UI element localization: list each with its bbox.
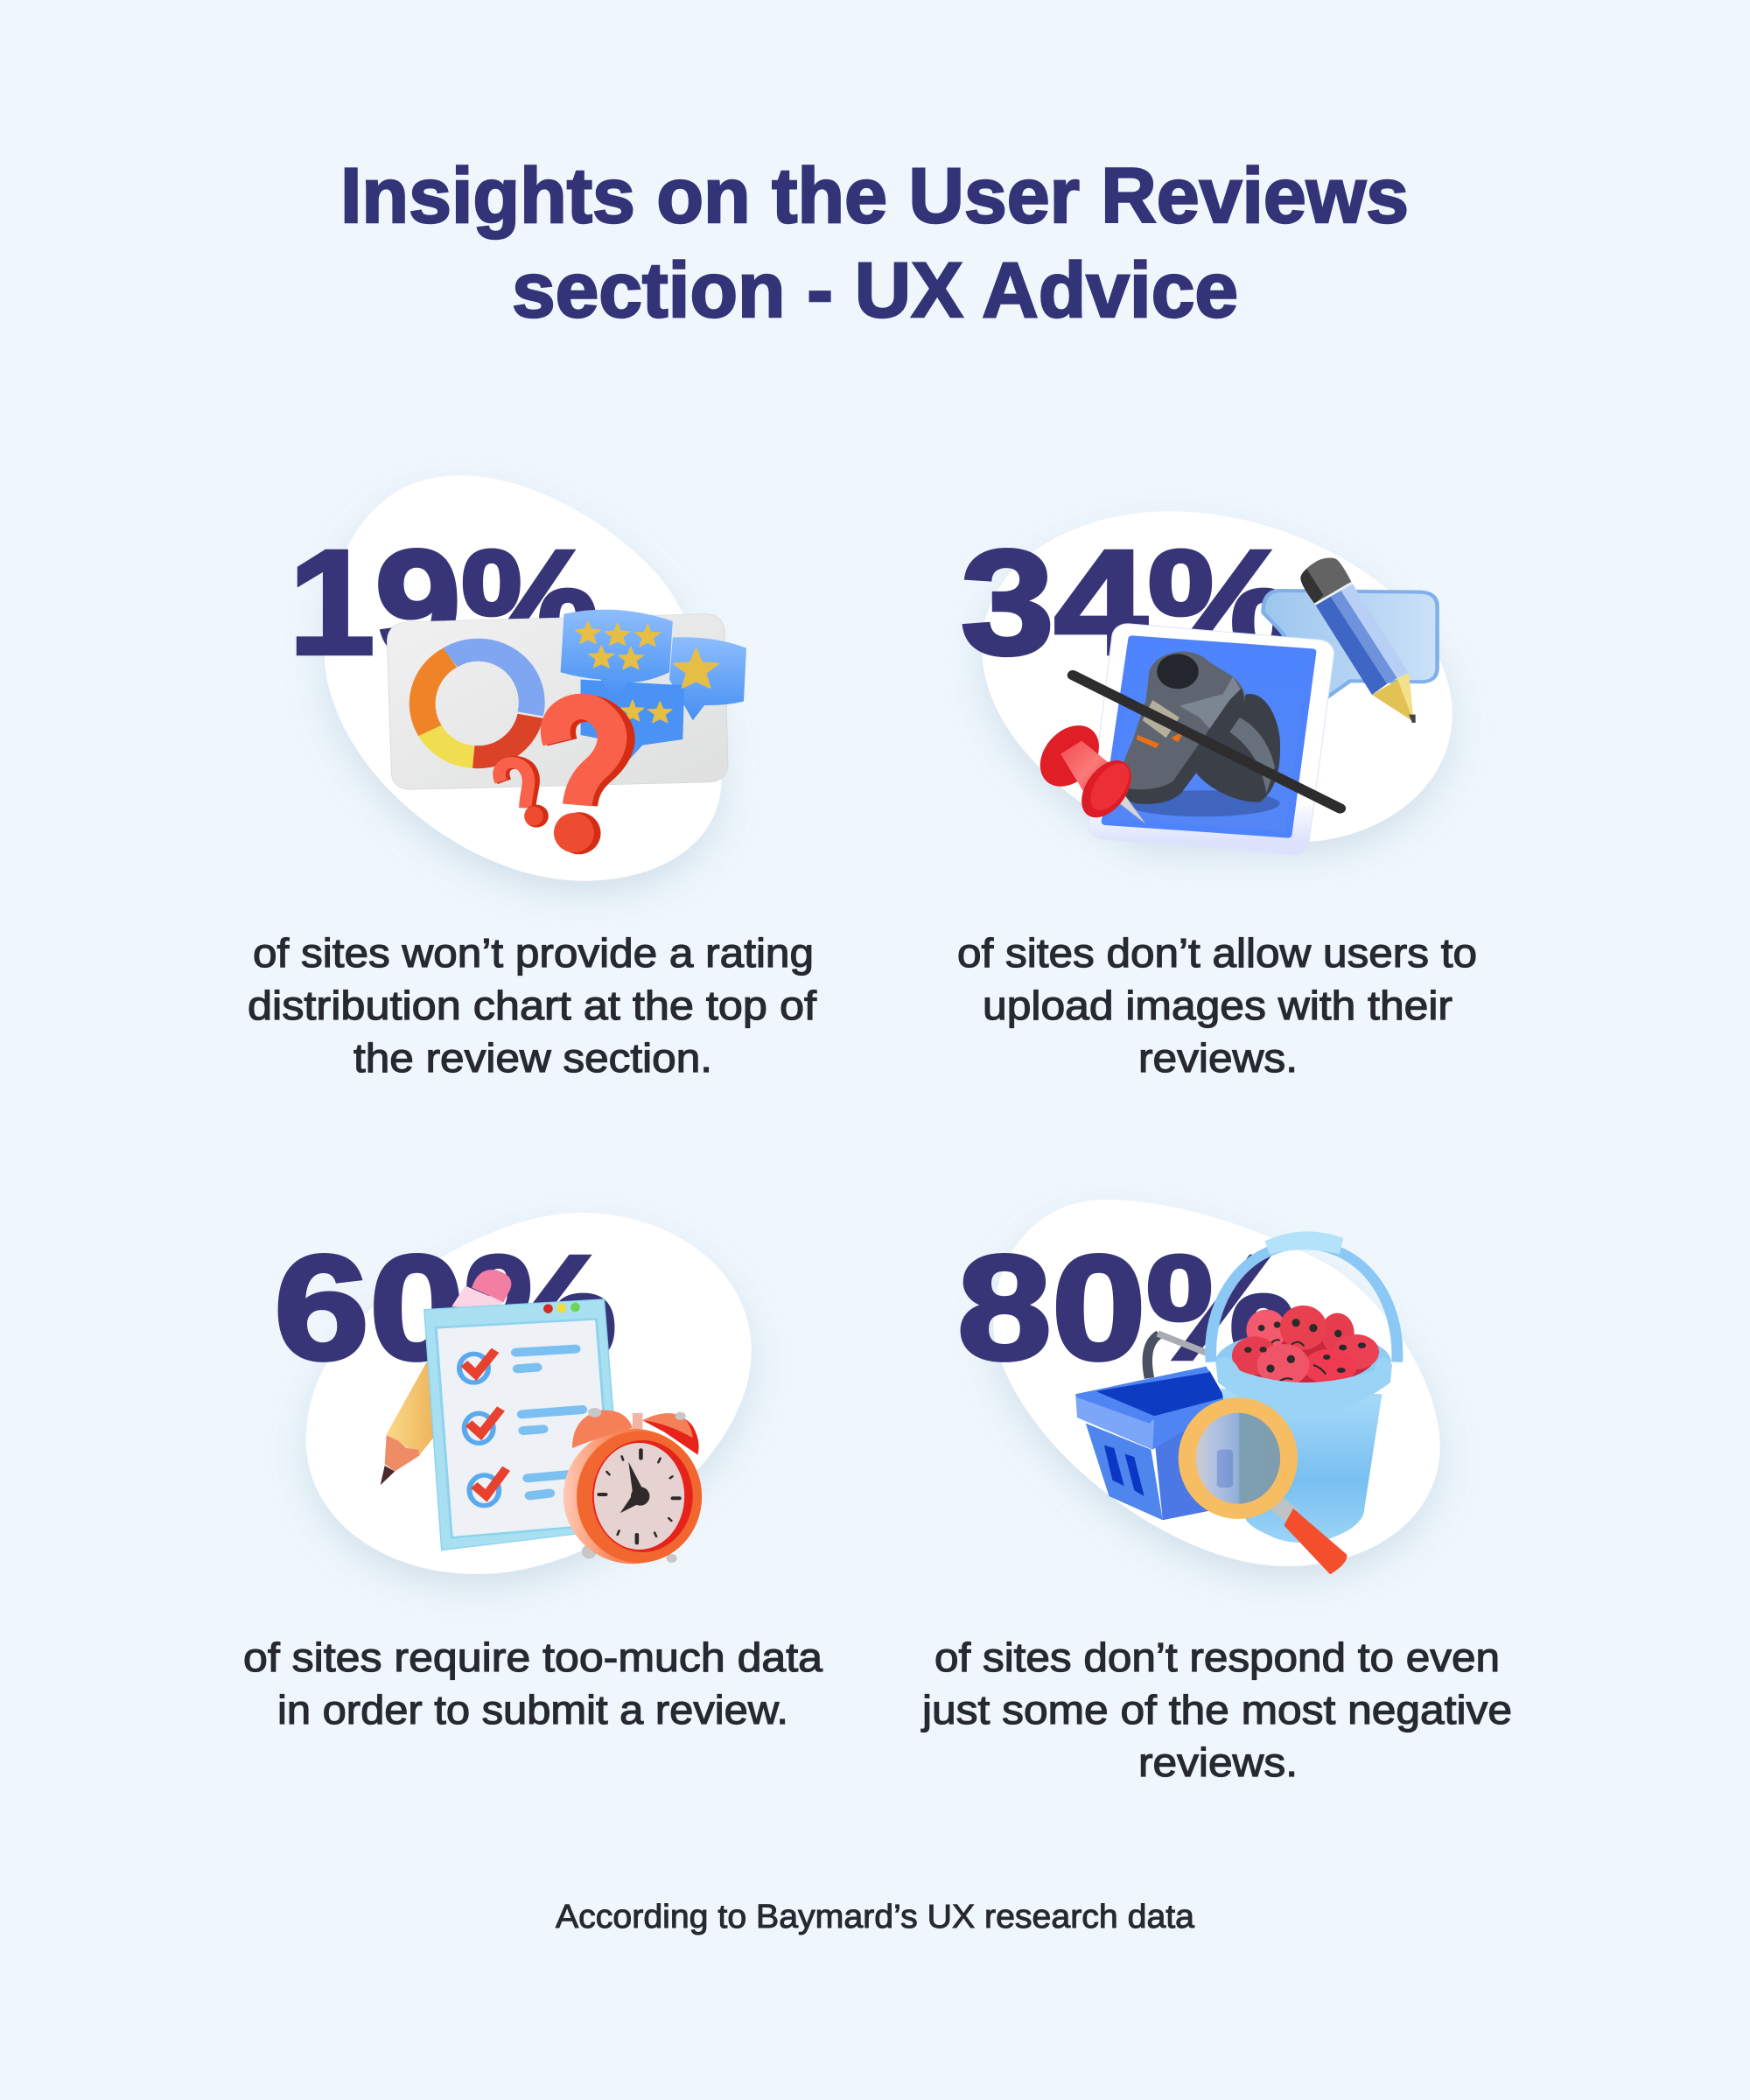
caption: 19%: of sites won’t provide a rating <box>253 930 814 976</box>
caption: 34%: upload images with their <box>983 983 1452 1028</box>
pencil <box>1300 557 1416 723</box>
panel: 19% stat <box>248 475 816 1081</box>
bucket <box>1211 1231 1397 1543</box>
panel: 80% stat <box>920 1200 1512 1785</box>
basket <box>1075 1334 1226 1520</box>
caption: 80% <box>920 1634 1512 1785</box>
blob: 19% <box>325 475 722 881</box>
checks <box>459 1350 507 1506</box>
caption: 60% <box>243 1634 822 1732</box>
pencil <box>381 1270 511 1485</box>
footer source note: According to Baymard’s UX research data <box>556 1899 1195 1936</box>
blob: 80% <box>993 1200 1440 1566</box>
caption: 80%: reviews. <box>1138 1740 1298 1785</box>
illustration: checklist and alarm clock <box>381 1270 702 1564</box>
title <box>340 151 1409 333</box>
panel: 34% stat <box>957 511 1477 1081</box>
text lines <box>516 1349 582 1495</box>
number: 80%: 80% <box>957 1225 1297 1391</box>
caption: 19% <box>248 930 816 1081</box>
blob: 60% <box>306 1213 752 1574</box>
illustration: basket, bucket and magnifier <box>1075 1231 1397 1574</box>
title: section - UX Advice <box>512 246 1238 333</box>
blob: 34% <box>982 511 1452 842</box>
caption: 80%: just some of the most negative <box>920 1687 1512 1732</box>
number: 34%: 34% <box>961 520 1297 686</box>
push pin <box>1028 717 1144 825</box>
illustration: shoes photo with strike-through <box>1028 557 1438 842</box>
card <box>387 614 728 789</box>
caption: 19%: distribution chart at the top of <box>248 983 816 1028</box>
speech bubbles <box>669 637 746 720</box>
caption: 34% <box>957 930 1477 1081</box>
checklist card <box>424 1299 622 1550</box>
caption: 60%: of sites require too-much data <box>243 1634 822 1680</box>
caption: 19%: the review section. <box>354 1035 712 1081</box>
window dots <box>543 1304 553 1313</box>
speech bubble <box>1264 591 1438 696</box>
strike-through line <box>1073 676 1340 808</box>
caption: 60%: in order to submit a review. <box>277 1687 788 1732</box>
photo <box>1105 639 1312 835</box>
caption: 34%: of sites don’t allow users to <box>957 930 1477 976</box>
caption: 34%: reviews. <box>1138 1035 1298 1081</box>
sad faces <box>1232 1306 1379 1386</box>
caption: 80%: of sites don’t respond to even <box>934 1634 1500 1680</box>
alarm clock <box>564 1408 702 1564</box>
illustration: rating chart and question marks <box>387 610 746 854</box>
magnifier <box>1187 1405 1347 1574</box>
photo frame <box>1104 637 1319 842</box>
number: 60%: 60% <box>274 1225 617 1391</box>
number: 19%: 19% <box>289 520 598 686</box>
title: Insights on the User Reviews <box>340 151 1409 239</box>
big question mark <box>556 706 620 805</box>
donut chart <box>423 650 532 757</box>
panel: 60% stat <box>243 1213 822 1732</box>
shoes <box>1121 651 1280 804</box>
small question mark <box>500 762 532 808</box>
